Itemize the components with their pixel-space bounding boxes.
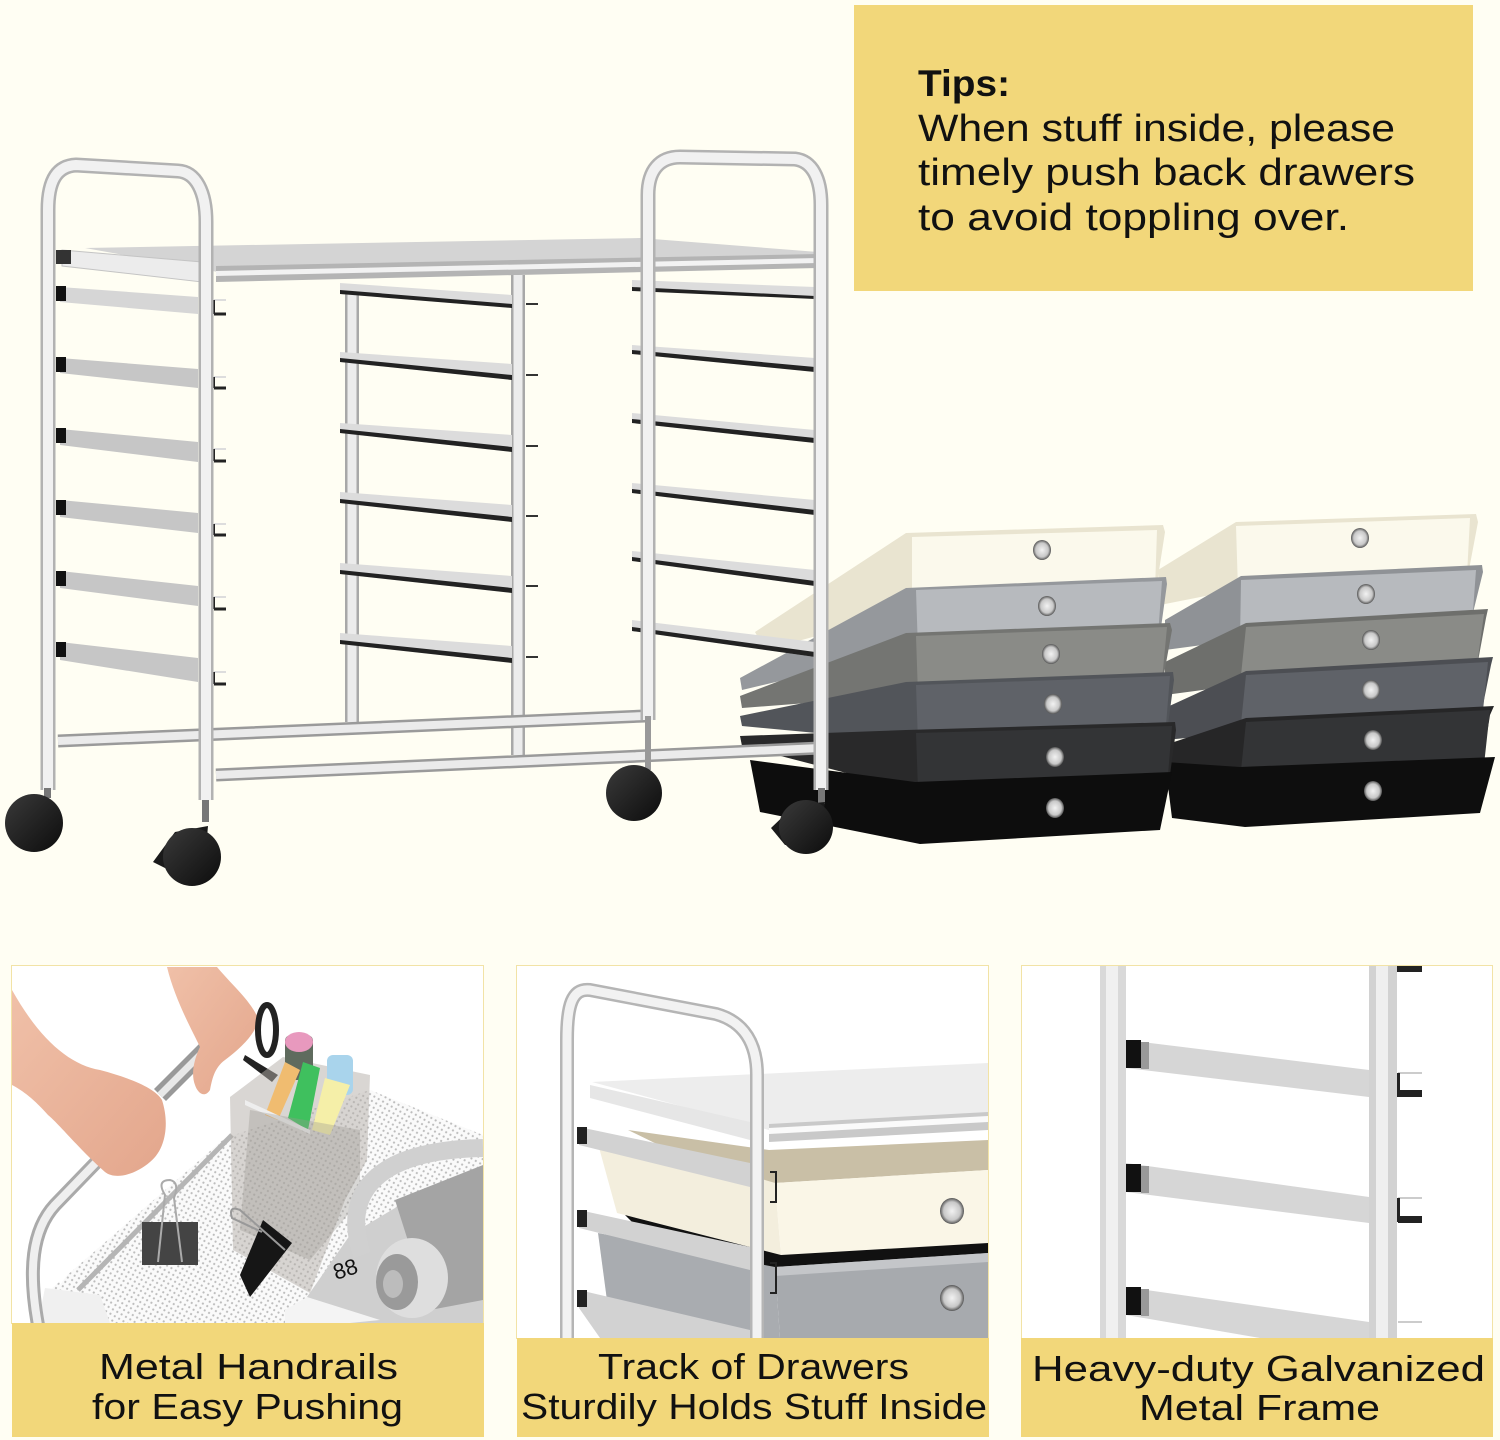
panel: metal handrails [12,966,484,1437]
caption: galvanized metal frame [1021,1338,1493,1437]
photo: hands pushing cart [12,967,483,1325]
tips text: to avoid toppling over. [918,197,1349,239]
headphones [356,1148,483,1318]
caption: track of drawers: Track of Drawers [598,1346,909,1387]
middle frame with slides [340,275,538,755]
right side slides [632,280,815,657]
tips text: timely push back drawers [918,152,1415,194]
cream drawer interior [628,1130,988,1183]
caption: metal handrails: for Easy Pushing [92,1386,403,1427]
cart frame [5,157,833,886]
caster wheels [5,716,833,886]
tips text [918,108,1415,239]
tips text: When stuff inside, please [918,108,1395,150]
caption: track of drawers: Sturdily Holds Stuff Inside [521,1386,987,1427]
right handle frame [648,157,821,790]
magazine: 88 [330,1253,361,1285]
black gap [625,1215,988,1270]
callout: tips box [854,5,1473,291]
magazine [285,1165,483,1323]
caption: track of drawers [517,1338,989,1437]
photo: frame closeup [1100,966,1422,1338]
left side slides [56,286,226,684]
mesh tray [50,1090,483,1323]
handrail [33,1047,232,1325]
right hand [167,967,258,1094]
top shelf [56,238,818,282]
drawer knobs: right stack [1351,528,1382,801]
pen holder with markers [230,1032,370,1293]
caption: galvanized metal frame: Metal Frame [1139,1387,1380,1428]
tips heading: Tips: [918,63,1010,104]
caption: galvanized metal frame: Heavy-duty Galvanized [1032,1348,1485,1389]
left handle frame [48,165,206,800]
scissors [243,1005,278,1082]
bottom rails [58,716,820,775]
caption: metal handrails [12,1323,484,1437]
binder clip: tilted [231,1209,292,1297]
drawers: left stack [740,525,1176,844]
rail tabs [1397,966,1422,1322]
photo: drawer track closeup [567,990,988,1345]
frame posts [1100,966,1397,1338]
caption: metal handrails: Metal Handrails [99,1346,398,1387]
handle [567,990,757,1345]
top side bar [590,1085,750,1140]
knobs [940,1198,964,1311]
cream drawer [600,1150,781,1255]
binder clip: flat [142,1180,198,1265]
grey drawer [598,1233,780,1338]
slides [577,1127,776,1338]
panel: galvanized metal frame [1021,966,1493,1437]
panel: track of drawers [516,966,989,1437]
drawer knobs: left stack [1033,540,1064,818]
drawers: right stack [1158,514,1495,827]
shelf [592,1063,988,1130]
left arm [12,990,166,1176]
slides [1126,1040,1369,1338]
